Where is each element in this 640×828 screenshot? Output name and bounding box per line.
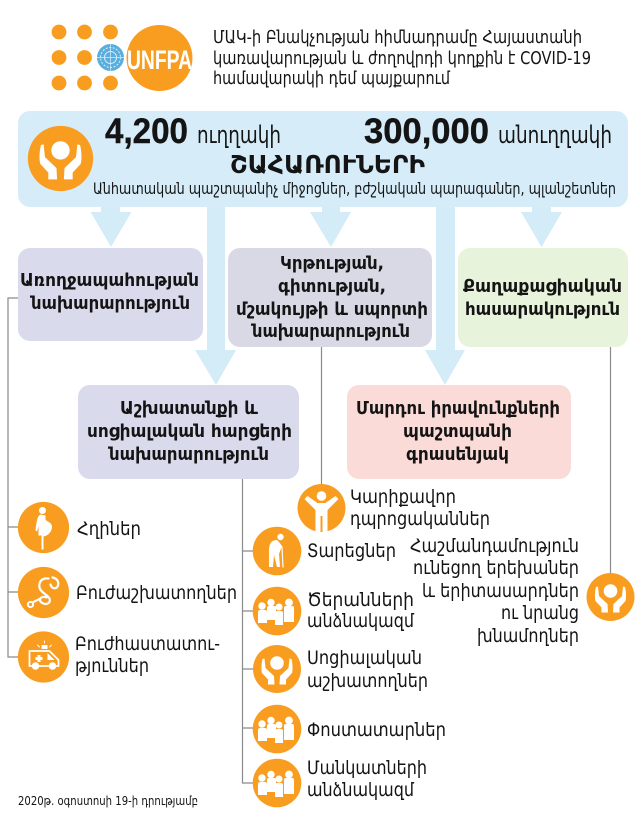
arrow: to human rights defender	[425, 207, 465, 385]
panel: labour ministry	[78, 385, 299, 479]
panel: civil society: Քաղաքացիական	[463, 276, 622, 297]
label: children with disabilities: խնամողներ	[477, 625, 579, 647]
icon: postal workers	[253, 705, 301, 753]
panel: education ministry: Կրթության,	[280, 253, 384, 274]
panel: civil society: հասարակություն	[465, 299, 620, 320]
panel: health ministry	[18, 248, 203, 341]
label: social workers	[307, 647, 428, 692]
connectors	[8, 298, 610, 783]
panel: human rights defender: Մարդու իրավունքների	[356, 398, 560, 419]
label: staff of elderly homes: Ծերանների	[307, 589, 414, 611]
label: social workers: Սոցիալական	[307, 647, 422, 669]
icon: ambulance	[18, 631, 69, 683]
icon: elderly	[253, 527, 301, 575]
panel: human rights defender	[347, 385, 571, 479]
logo: UNFPA	[52, 25, 192, 91]
label: orphanage staff: Մանկատների	[307, 757, 427, 779]
icon: pregnant women	[18, 502, 69, 553]
icon: orphanage staff	[253, 759, 301, 807]
icon: staff of elderly homes	[253, 587, 301, 635]
arrow: to labour ministry	[195, 207, 236, 385]
label: social workers: աշխատողներ	[307, 670, 428, 692]
panel: beneficiaries	[18, 111, 628, 207]
label: children with disabilities: ունեցող երեխաներ	[413, 557, 579, 579]
arrow: to health ministry	[90, 207, 132, 247]
icon: schoolchildren in need	[298, 484, 346, 532]
label: health workers: Բուժաշխատողներ	[76, 582, 237, 604]
panel: education ministry	[228, 248, 432, 347]
icon: stethoscope	[18, 567, 69, 618]
direct count: 4,200	[105, 112, 188, 151]
label: schoolchildren in need: Կարիքավոր	[350, 486, 456, 508]
label: staff of elderly homes	[307, 589, 415, 632]
label: children with disabilities: Հաշմանդամություն	[410, 535, 579, 557]
arrow: to civil society	[521, 207, 562, 247]
panel: labour ministry: Աշխատանքի և	[120, 398, 258, 419]
header text: համավարակի դեմ պայքարում	[213, 68, 450, 89]
panel: health ministry: Առողջապահության	[20, 270, 199, 291]
footnote: 2020թ. օգոստոսի 19-ի դրությամբ	[18, 793, 198, 808]
label: children with disabilities	[410, 535, 579, 647]
icon: children with disabilities	[586, 573, 634, 621]
panel: labour ministry: սոցիալական հարցերի	[87, 421, 292, 442]
panel: education ministry: նախարարություն	[250, 321, 410, 342]
label: health facilities	[75, 633, 220, 677]
panel heading: ՇԱՀԱՌՈՒՆԵՐԻ	[230, 150, 425, 179]
label: staff of elderly homes: անձնակազմ	[307, 610, 415, 632]
label: children with disabilities: ու նրանց	[501, 602, 579, 624]
label: schoolchildren in need: դպրոցականներ	[350, 508, 490, 530]
panel: health ministry: նախարարություն	[29, 293, 190, 314]
label: pregnant women: Հղիներ	[77, 518, 141, 540]
indirect count: 300,000	[364, 112, 489, 151]
label: elderly: Տարեցներ	[307, 540, 396, 562]
label: health facilities: թյուններ	[75, 655, 149, 677]
icon: hands	[28, 126, 93, 191]
logo: UNFPA: UNFPA	[127, 45, 192, 75]
label: orphanage staff	[307, 757, 427, 801]
icon: social workers	[253, 645, 301, 693]
label: postal workers: Փոստատարներ	[307, 719, 446, 741]
panel: beneficiaries: ուղղակի	[197, 121, 281, 149]
panel: human rights defender: պաշտպանի	[403, 421, 512, 442]
header text	[213, 27, 591, 89]
label: health facilities: Բուժհաստատու-	[75, 633, 220, 655]
panel: education ministry: գիտության,	[278, 276, 386, 297]
panel: education ministry: մշակույթի և սպորտի	[236, 299, 428, 320]
label: orphanage staff: անձնակազմ	[307, 779, 415, 801]
panel: human rights defender: գրասենյակ	[406, 444, 509, 465]
label: schoolchildren in need	[350, 486, 490, 530]
label: children with disabilities: և երիտասարդներ	[422, 580, 579, 602]
panel: civil society	[458, 248, 628, 347]
arrow: to education ministry	[310, 207, 351, 247]
panel: labour ministry: նախարարություն	[107, 444, 269, 465]
